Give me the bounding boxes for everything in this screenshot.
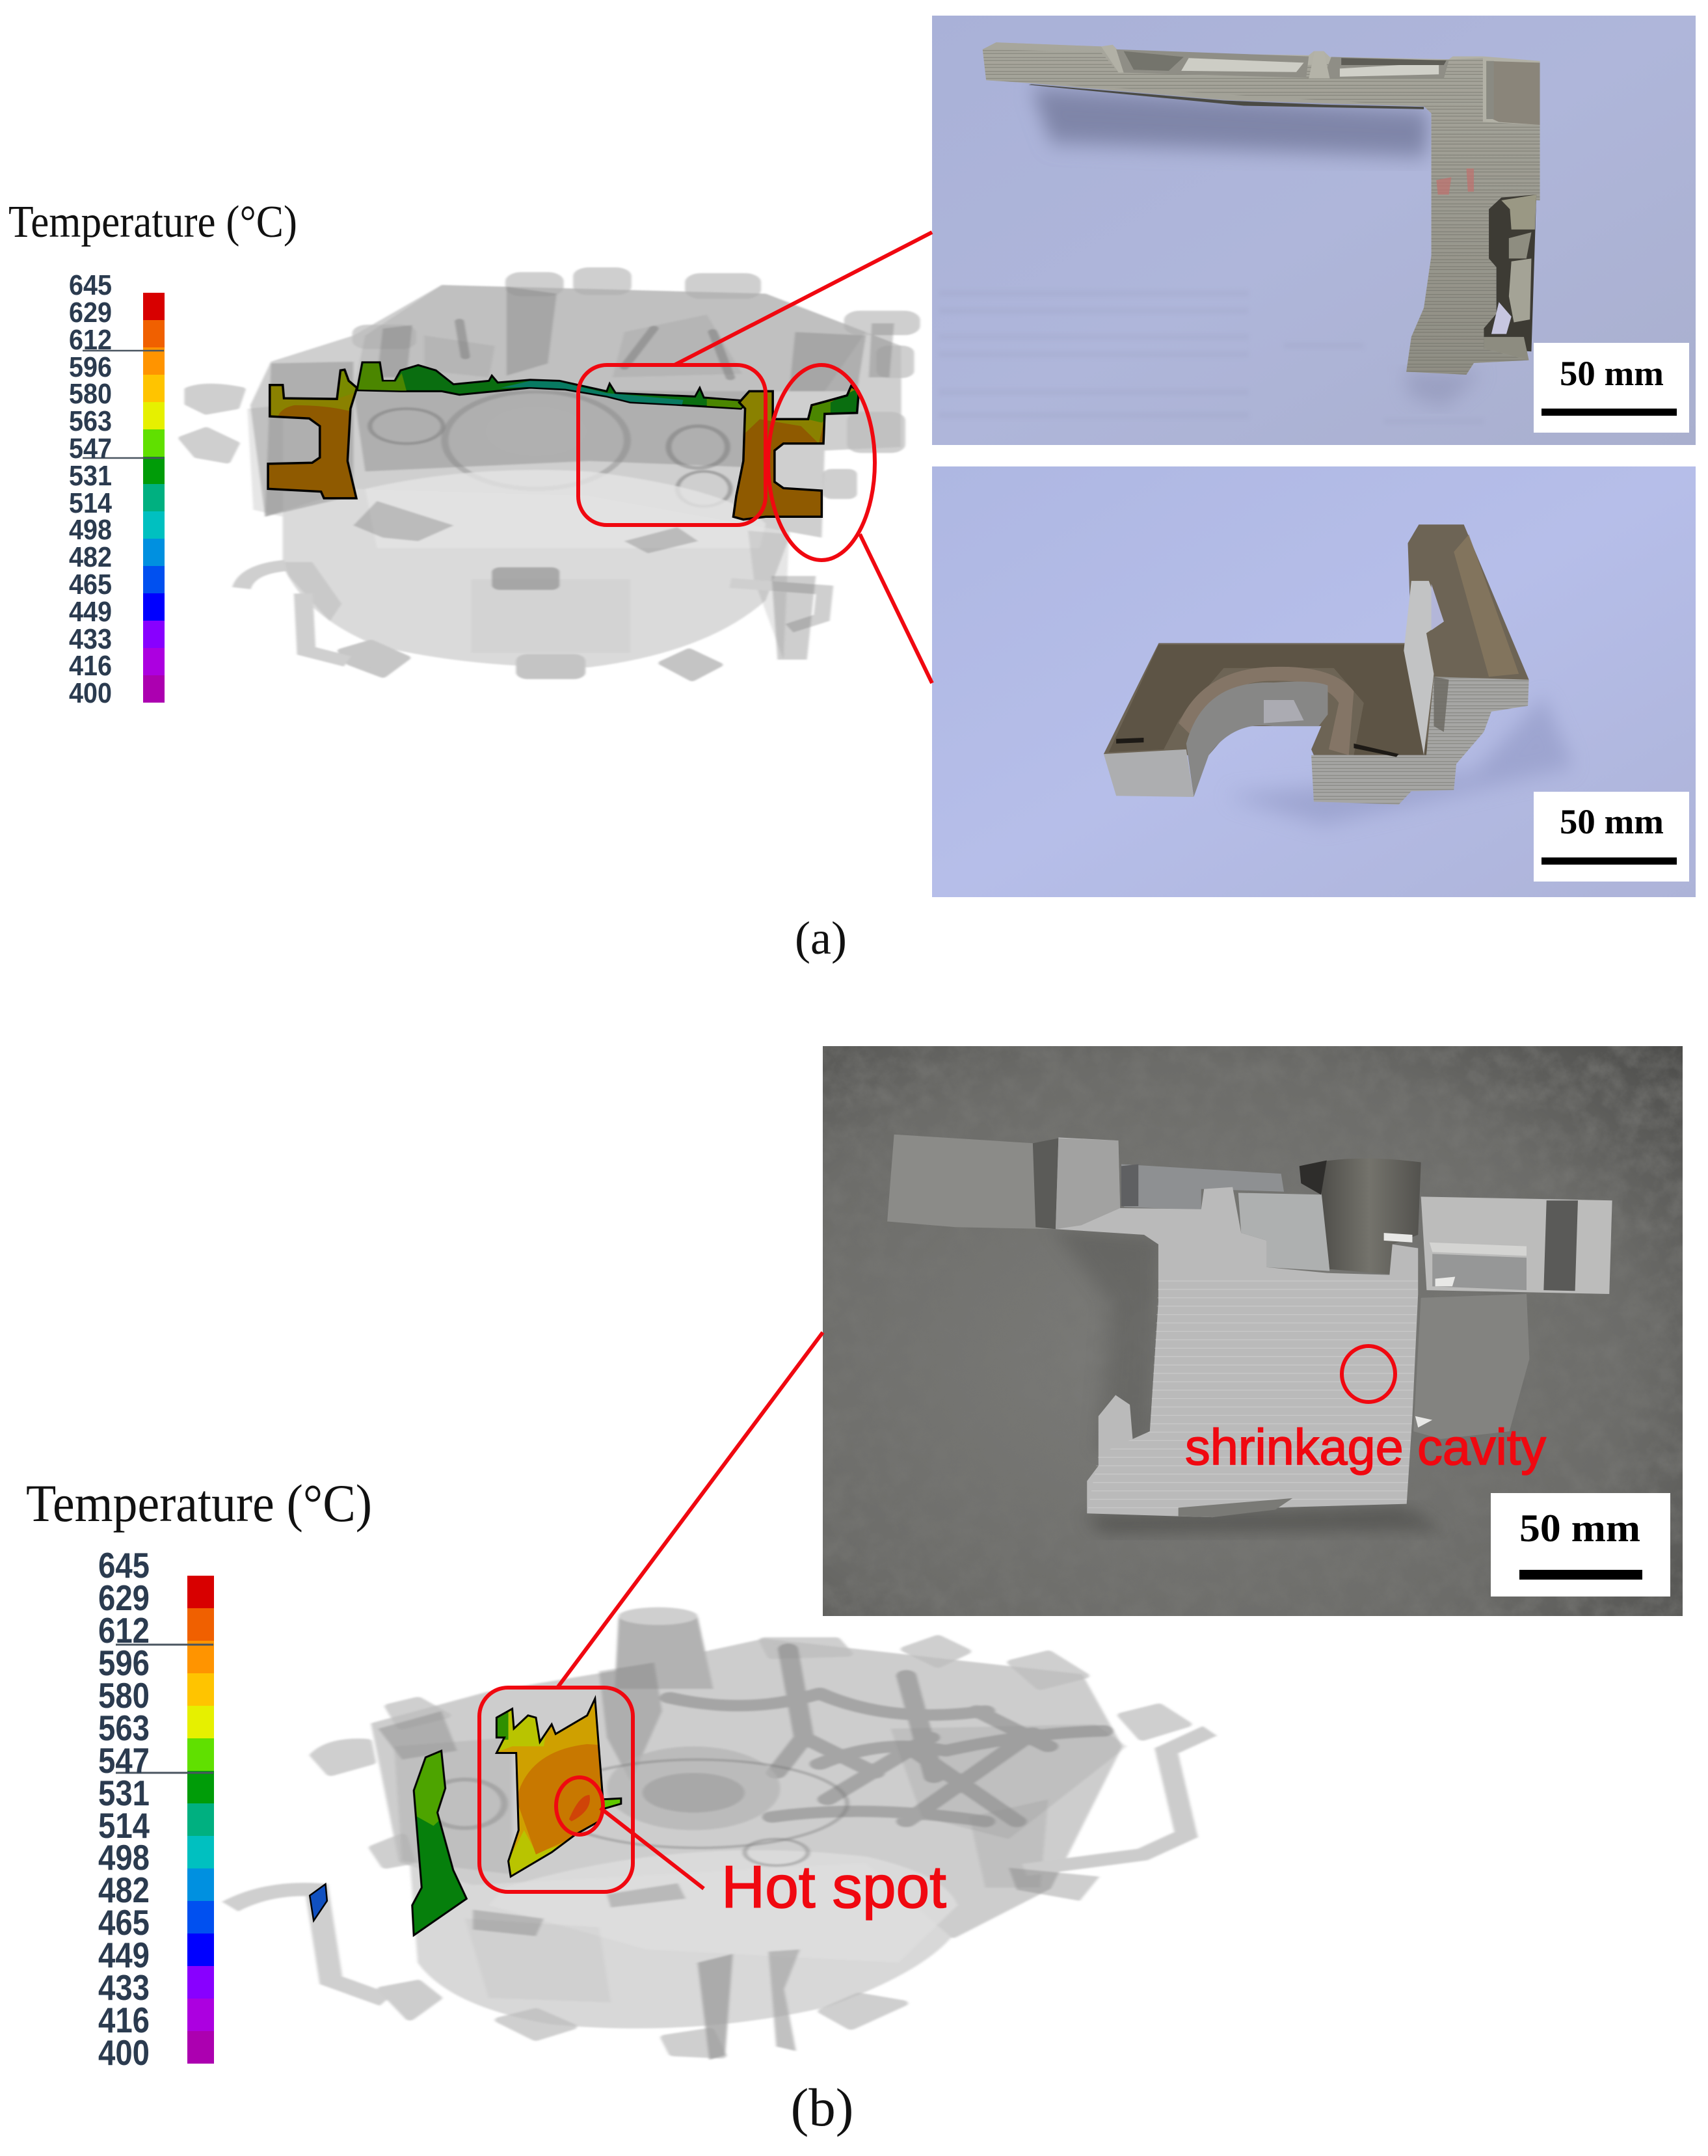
colour bar labels (a): 514 <box>69 487 112 519</box>
scale bar: 50 mm (a, top) <box>1534 343 1689 433</box>
photo: second sectioned casting (a) <box>932 466 1696 897</box>
callouts: red frame, ellipse and leader lines (a) <box>578 232 932 683</box>
colour bar labels (b): 449 <box>98 1935 150 1975</box>
colour bar labels (a): 531 <box>69 460 112 492</box>
scale bar: 50 mm (a, bottom): 50 mm <box>1560 802 1664 841</box>
colour bar labels (a): 465 <box>69 569 112 600</box>
colour bar labels (a): 498 <box>69 514 112 546</box>
callout: shrinkage cavity circle <box>1342 1346 1395 1402</box>
photo: sectioned casting with shrinkage cavity (b) <box>823 1046 1683 1616</box>
colour bar labels (b): 547 <box>98 1740 150 1781</box>
colour bar labels (b): 482 <box>98 1870 150 1910</box>
panel (a): simulated casting section <box>8 197 916 709</box>
colour bar labels (b): 416 <box>98 2000 150 2040</box>
colour bar labels (b): 465 <box>98 1902 150 1943</box>
grey translucent casting model (b) <box>230 1608 1210 2060</box>
colour bar (a) <box>83 293 165 703</box>
callouts: red frame, hot spot circle and leader lines (b) <box>479 1332 823 1892</box>
colour bar labels (b): 433 <box>98 1967 150 2008</box>
colour bar labels (a): 482 <box>69 541 112 573</box>
photo: top sectioned casting (a) <box>932 16 1696 445</box>
colour bar labels (a): 596 <box>69 351 112 383</box>
colour bar labels (a): 645 <box>69 269 112 301</box>
colour bar labels (b): 514 <box>98 1805 150 1846</box>
scale bar: 50 mm (b) <box>1491 1493 1670 1597</box>
caption (b): (b) <box>791 2077 853 2137</box>
panel (b): simulated casting section <box>26 1474 1210 2073</box>
colour bar labels (a): 547 <box>69 433 112 465</box>
colour bar labels (b): 612 <box>98 1610 150 1651</box>
colour bar labels (a) <box>69 269 112 709</box>
colour bar labels (b): 580 <box>98 1675 150 1716</box>
heading: temperature legend (a): Temperature (°C) <box>8 197 297 247</box>
colour bar labels (b): 498 <box>98 1837 150 1878</box>
colour bar labels (b): 400 <box>98 2032 150 2073</box>
colour bar labels (a): 629 <box>69 297 112 329</box>
colour bar labels (b): 563 <box>98 1708 150 1748</box>
scale bar: 50 mm (b): 50 mm <box>1519 1507 1640 1550</box>
colour bar labels (a): 449 <box>69 596 112 628</box>
scale bar: 50 mm (a, bottom) <box>1534 792 1689 882</box>
cut section temperature map (b) <box>310 1693 630 1941</box>
colour bar labels (b): 645 <box>98 1545 150 1585</box>
colour bar labels (b): 596 <box>98 1643 150 1683</box>
colour bar labels (a): 563 <box>69 405 112 437</box>
colour bar labels (b): 531 <box>98 1773 150 1813</box>
colour bar labels (a): 400 <box>69 677 112 709</box>
colour bar labels (b) <box>98 1545 150 2073</box>
caption (a): (a) <box>795 912 847 964</box>
colour bar labels (a): 580 <box>69 378 112 410</box>
grey translucent casting model (a) <box>183 270 916 679</box>
scale bar: 50 mm (a, top): 50 mm <box>1560 354 1664 393</box>
colour bar labels (b): 629 <box>98 1578 150 1618</box>
colour bar labels (a): 612 <box>69 324 112 356</box>
heading: temperature legend (b): Temperature (°C) <box>26 1474 372 1533</box>
colour bar labels (a): 416 <box>69 650 112 682</box>
cut section temperature map (a) <box>259 362 866 524</box>
colour bar labels (a): 433 <box>69 623 112 655</box>
colour bar (b) <box>116 1576 214 2064</box>
label: shrinkage cavity: shrinkage cavity <box>1185 1418 1546 1476</box>
label: hot spot: Hot spot <box>721 1854 946 1920</box>
